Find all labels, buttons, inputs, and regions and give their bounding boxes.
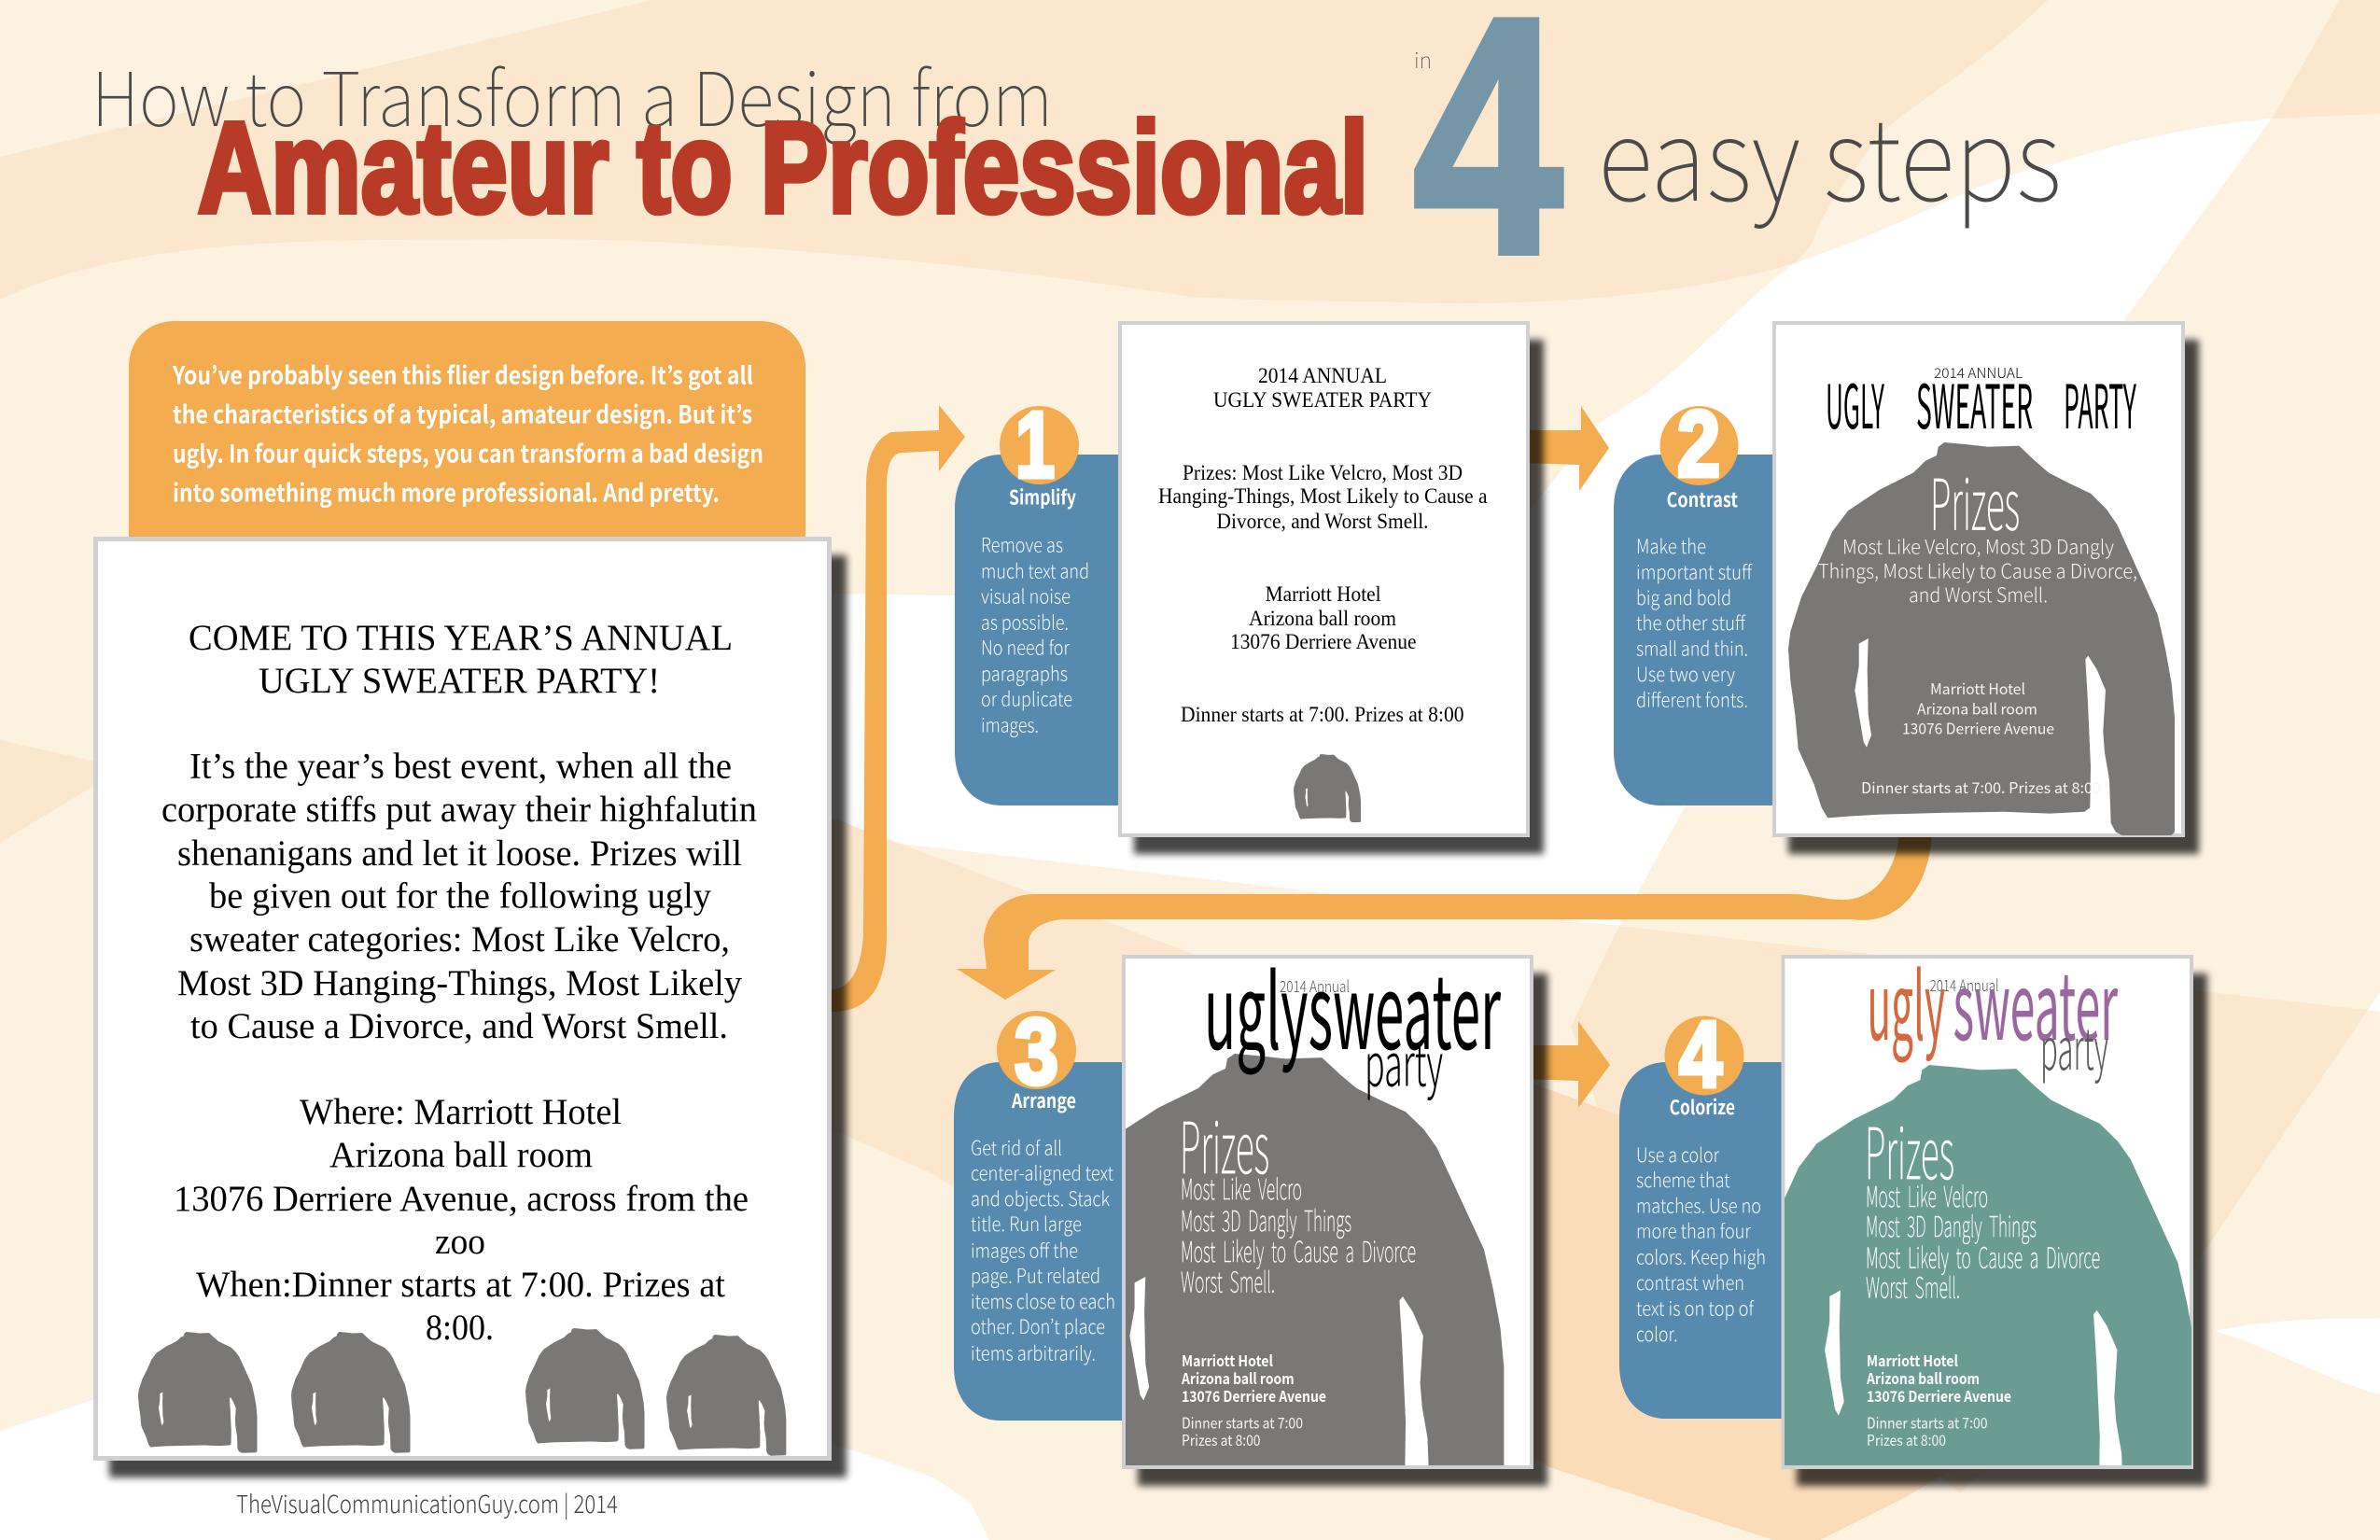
panel: step 4 flier: Marriott Hotel: [1867, 1349, 1958, 1371]
icon: number 1 badge: [1000, 393, 1079, 497]
title: easy steps: easy steps: [1598, 69, 2062, 234]
panel: step 4 flier: 2014 Annual: [1930, 973, 1999, 996]
panel: step 3 flier: Dinner starts at 7:00: [1182, 1411, 1303, 1434]
panel: step 3 arrange text box: items arbitrarily.: [971, 1338, 1096, 1366]
panel: step 4 colorize text box: scheme that: [1636, 1166, 1730, 1194]
panel: step 4 colorize text box: [1619, 1062, 1787, 1419]
panel: step 4 colorize text box: contrast when: [1636, 1268, 1744, 1296]
panel: step 4 flier: ugly: [1867, 932, 1945, 1067]
panel: step 4 colorize text box: more than four: [1636, 1217, 1751, 1245]
panel: step 1 flier: 2014 ANNUAL: [1258, 364, 1387, 387]
panel: step 2 contrast text box: big and bold: [1636, 583, 1731, 611]
panel: step 2 flier: Dinner starts at 7:00. Prizes at 8:00: [1861, 776, 2101, 798]
panel: step 3 flier: [1122, 955, 1553, 1491]
arrow: step 3 to step 4: [1526, 1021, 1610, 1108]
panel: step 1 flier: 13076 Derriere Avenue: [1230, 630, 1417, 653]
panel: step 2 contrast text box: important stuff: [1636, 557, 1753, 585]
panel: step 2 flier: Arizona ball room: [1917, 696, 2037, 719]
panel: original flier: to Cause a Divorce, and Worst Smell.: [190, 1006, 728, 1046]
panel: step 1 simplify text box: [955, 455, 1125, 805]
panel: original flier: sweater categories: Most Like Velcro,: [189, 919, 730, 959]
panel: original flier: zoo: [435, 1222, 485, 1262]
panel: intro callout: You’ve probably seen this flier design before. It’s got all: [172, 357, 753, 392]
panel: step 2 contrast text box: Use two very: [1636, 660, 1735, 688]
panel: step 1 flier: Dinner starts at 7:00. Prizes at 8:00: [1181, 703, 1463, 726]
panel: step 2 flier: Things, Most Likely to Cause a Divorce,: [1818, 556, 2137, 584]
panel: step 4 flier: Worst Smell.: [1866, 1266, 1960, 1307]
panel: original flier: shenanigans and let it loose. Prizes will: [177, 833, 742, 874]
panel: step 3 flier: 2014 Annual: [1280, 973, 1350, 997]
panel: step 2 contrast text box: the other stuff: [1636, 609, 1746, 637]
panel: step 2 contrast text box: Make the: [1636, 532, 1706, 560]
panel: original flier: Where: Marriott Hotel: [300, 1092, 622, 1132]
panel: step 3 arrange text box: [954, 1062, 1129, 1421]
panel: step 3 flier: Most Like Velcro: [1181, 1167, 1302, 1208]
panel: original flier: be given out for the following ugly: [209, 875, 711, 917]
label: Contrast: Contrast: [1667, 485, 1738, 513]
panel: step 4 colorize text box: text is on top of: [1636, 1294, 1755, 1322]
panel: step 1 simplify text box: paragraphs: [981, 659, 1068, 687]
panel: step 2 contrast text box: different fonts.: [1636, 685, 1748, 713]
panel: step 2 contrast text box: small and thin.: [1636, 635, 1748, 663]
label: Simplify: Simplify: [1009, 483, 1076, 511]
panel: original flier: When:Dinner starts at 7:00. Prizes at: [196, 1265, 725, 1305]
panel: step 4 flier: 13076 Derriere Avenue: [1867, 1384, 2011, 1407]
panel: step 4 flier: Prizes: [1865, 1097, 1954, 1199]
panel: step 1 flier: Divorce, and Worst Smell.: [1217, 510, 1428, 533]
label: Arrange: Arrange: [1011, 1086, 1076, 1114]
panel: step 4 flier: Arizona ball room: [1866, 1366, 1980, 1389]
panel: step 3 flier: Marriott Hotel: [1182, 1349, 1273, 1371]
panel: step 1 simplify text box: visual noise: [981, 582, 1071, 610]
panel: step 3 flier: Most Likely to Cause a Divorce: [1181, 1229, 1416, 1270]
panel: step 3 arrange text box: center-aligned text: [971, 1158, 1114, 1186]
panel: step 4 flier: Most Likely to Cause a Divorce: [1866, 1236, 2100, 1277]
panel: intro callout: the characteristics of a typical, amateur design. But it’s: [173, 396, 752, 431]
icon: number 4 badge: 4: [1679, 1002, 1722, 1107]
panel: step 1 flier: Marriott Hotel: [1266, 582, 1381, 606]
panel: step 4 flier: Prizes at 8:00: [1867, 1428, 1946, 1450]
panel: original flier: Arizona ball room: [329, 1135, 593, 1175]
panel: step 4 colorize text box: matches. Use no: [1636, 1192, 1761, 1220]
label: Colorize: Colorize: [1670, 1093, 1735, 1121]
panel: original flier: COME TO THIS YEAR’S ANNUAL: [189, 618, 733, 658]
icon: number 2 badge: [1659, 392, 1738, 497]
arrow: flier to step 1: [821, 405, 965, 1012]
panel: step 4 flier: Most Like Velcro: [1866, 1174, 1988, 1215]
panel: step 4 flier: party: [2040, 1002, 2108, 1086]
panel: step 3 flier: 13076 Derriere Avenue: [1182, 1384, 1326, 1407]
panel: step 4 flier: sweater: [1953, 932, 2118, 1067]
panel: step 1 flier: Prizes: Most Like Velcro, Most 3D: [1183, 461, 1463, 484]
panel: step 3 flier: Prizes: [1180, 1091, 1269, 1194]
panel: step 3 arrange text box: and objects. Stack: [971, 1184, 1110, 1212]
panel: step 3 arrange text box: page. Put related: [971, 1261, 1100, 1289]
panel: step 2 flier: Most Like Velcro, Most 3D Dangly: [1842, 532, 2114, 560]
icon: number 2 badge: 2: [1677, 392, 1720, 497]
panel: step 4 colorize text box: color.: [1636, 1320, 1678, 1348]
icon: number 4 badge: [1665, 1002, 1743, 1107]
panel: original flier: UGLY SWEATER PARTY!: [259, 661, 660, 701]
panel: step 3 flier: Most 3D Dangly Things: [1181, 1198, 1351, 1239]
panel: step 3 flier: uglysweater: [1204, 930, 1501, 1079]
panel: intro callout: [129, 321, 805, 560]
panel: step 2 flier: SWEATER: [1916, 358, 2033, 446]
panel: step 1 simplify text box: Remove as: [981, 531, 1063, 559]
icon: number 3 badge: 3: [1015, 1000, 1058, 1104]
arrow: step 2 to step 3: [957, 826, 1932, 1000]
panel: step 3 arrange text box: images off the: [971, 1236, 1078, 1264]
panel: step 3 arrange text box: title. Run large: [971, 1210, 1082, 1238]
panel: step 3 arrange text box: Get rid of all: [971, 1133, 1062, 1161]
panel: step 1 simplify text box: much text and: [981, 556, 1089, 584]
panel: step 3 flier: Worst Smell.: [1181, 1259, 1275, 1300]
panel: step 1 flier: UGLY SWEATER PARTY: [1213, 388, 1432, 412]
panel: step 3 flier: Prizes at 8:00: [1182, 1428, 1261, 1450]
panel: step 1 flier: [1120, 323, 1544, 854]
panel: step 1 flier: Hanging-Things, Most Likely to Cause a: [1158, 484, 1488, 508]
panel: intro callout: into something much more professional. And pretty.: [173, 474, 720, 510]
panel: original flier: 8:00.: [426, 1308, 494, 1348]
title word: in: in: [1414, 43, 1432, 75]
panel: step 2 flier: 13076 Derriere Avenue: [1902, 717, 2054, 739]
panel: original flier: 13076 Derriere Avenue, across from the: [174, 1179, 749, 1219]
panel: step 1 simplify text box: or duplicate: [981, 685, 1072, 713]
panel: step 2 flier: Marriott Hotel: [1930, 677, 2025, 699]
panel: step 4 flier: Most 3D Dangly Things: [1866, 1204, 2037, 1245]
panel: step 1 simplify text box: images.: [981, 710, 1039, 738]
panel: step 4 colorize text box: Use a color: [1636, 1141, 1719, 1169]
panel: step 2 flier: [1774, 323, 2199, 854]
panel: step 4 colorize text box: colors. Keep high: [1636, 1243, 1766, 1271]
panel: intro callout: ugly. In four quick steps, you can transform a bad design: [173, 435, 763, 470]
panel: step 2 flier: PARTY: [2064, 358, 2136, 446]
panel: step 4 flier: Dinner starts at 7:00: [1867, 1411, 1988, 1434]
panel: step 3 arrange text box: items close to each: [971, 1287, 1115, 1315]
panel: step 3 arrange text box: other. Don’t place: [971, 1312, 1105, 1340]
icon: number 1 badge: 1: [1015, 393, 1055, 497]
panel: step 1 simplify text box: as possible.: [981, 608, 1069, 636]
title: Amateur to Professional: Amateur to Professional: [198, 96, 1368, 240]
panel: step 4 flier: [1781, 955, 2213, 1491]
panel: step 3 flier: party: [1365, 1017, 1443, 1103]
panel: step 2 flier: and Worst Smell.: [1909, 581, 2048, 609]
panel: original flier: It’s the year’s best event, when all the: [189, 747, 732, 786]
panel: step 2 flier: UGLY: [1826, 358, 1884, 446]
panel: step 2 flier: 2014 ANNUAL: [1934, 363, 2023, 383]
panel: step 3 flier: Arizona ball room: [1181, 1366, 1295, 1389]
panel: step 2 contrast text box: [1614, 455, 1778, 805]
panel: step 1 simplify text box: No need for: [981, 634, 1070, 662]
panel: original flier: corporate stiffs put away their highfalutin: [161, 790, 757, 830]
panel: original flier: [95, 539, 847, 1477]
panel: step 2 flier: Prizes: [1930, 448, 2020, 551]
panel: step 1 flier: Arizona ball room: [1249, 607, 1396, 630]
title line: How to Transform a Design from: How to Transform a Design from: [91, 40, 1053, 148]
icon: number 3 badge: [997, 1000, 1076, 1104]
arrow: step 1 to step 2: [1521, 406, 1609, 491]
footer credit: TheVisualCommunicationGuy.com | 2014: [236, 1486, 618, 1520]
panel: original flier: Most 3D Hanging-Things, Most Likely: [177, 963, 742, 1003]
